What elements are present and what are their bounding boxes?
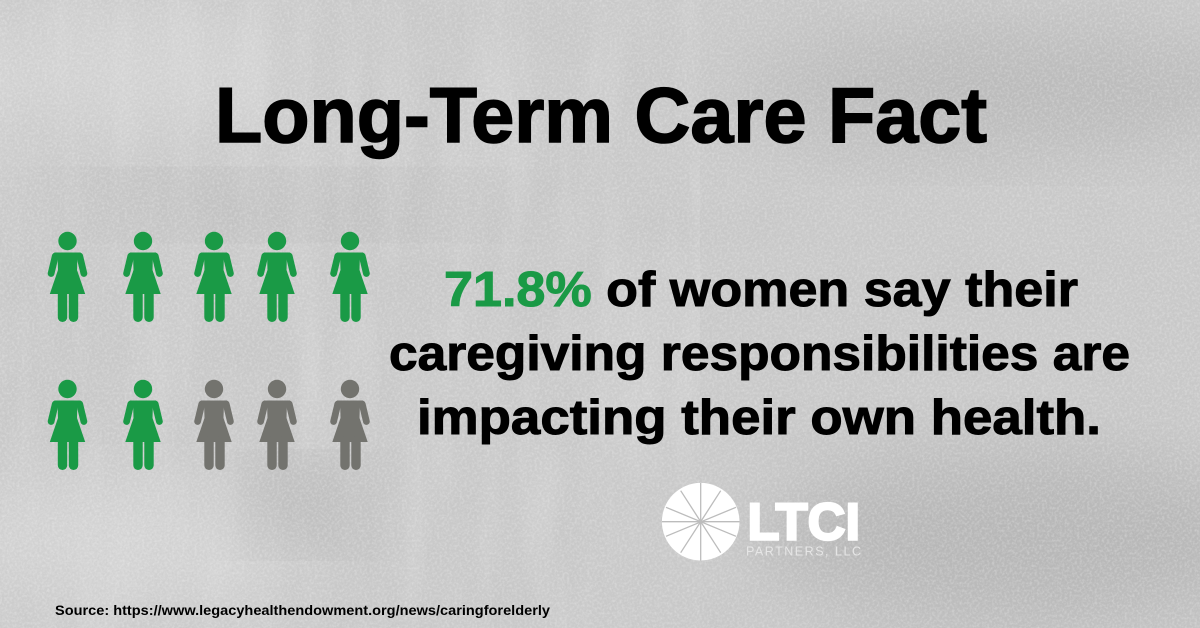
logo wordmark: LTCI — [748, 493, 860, 551]
icon: woman 8 grey — [196, 380, 232, 470]
statistic text block: 71.8% of women say their — [444, 263, 1078, 317]
icon: woman 6 green — [50, 380, 85, 470]
icon: segmented white wheel — [662, 483, 740, 560]
icon grid: 7 of 10 women highlighted — [50, 232, 368, 470]
title: Long-Term Care Fact — [215, 71, 987, 159]
icon: woman 9 grey — [259, 380, 295, 470]
statistic text block: caregiving responsibilities are — [389, 327, 1130, 381]
statistic text block — [389, 263, 1130, 445]
source note: Source: https://www.legacyhealthendowment.org/news/caringforelderly — [55, 603, 551, 618]
icon: woman 7 green — [125, 380, 161, 470]
logo subtitle: PARTNERS, LLC — [746, 544, 861, 558]
icon: woman 4 green — [259, 232, 295, 322]
icon: woman 2 green — [125, 232, 161, 322]
statistic text block: impacting their own health. — [417, 391, 1101, 445]
icon: woman 5 green — [332, 232, 368, 322]
icon: woman 10 grey — [332, 380, 368, 470]
logo: LTCI Partners, LLC — [662, 483, 861, 560]
icon: woman 3 green — [196, 232, 232, 322]
icon: woman 1 green — [50, 232, 85, 322]
